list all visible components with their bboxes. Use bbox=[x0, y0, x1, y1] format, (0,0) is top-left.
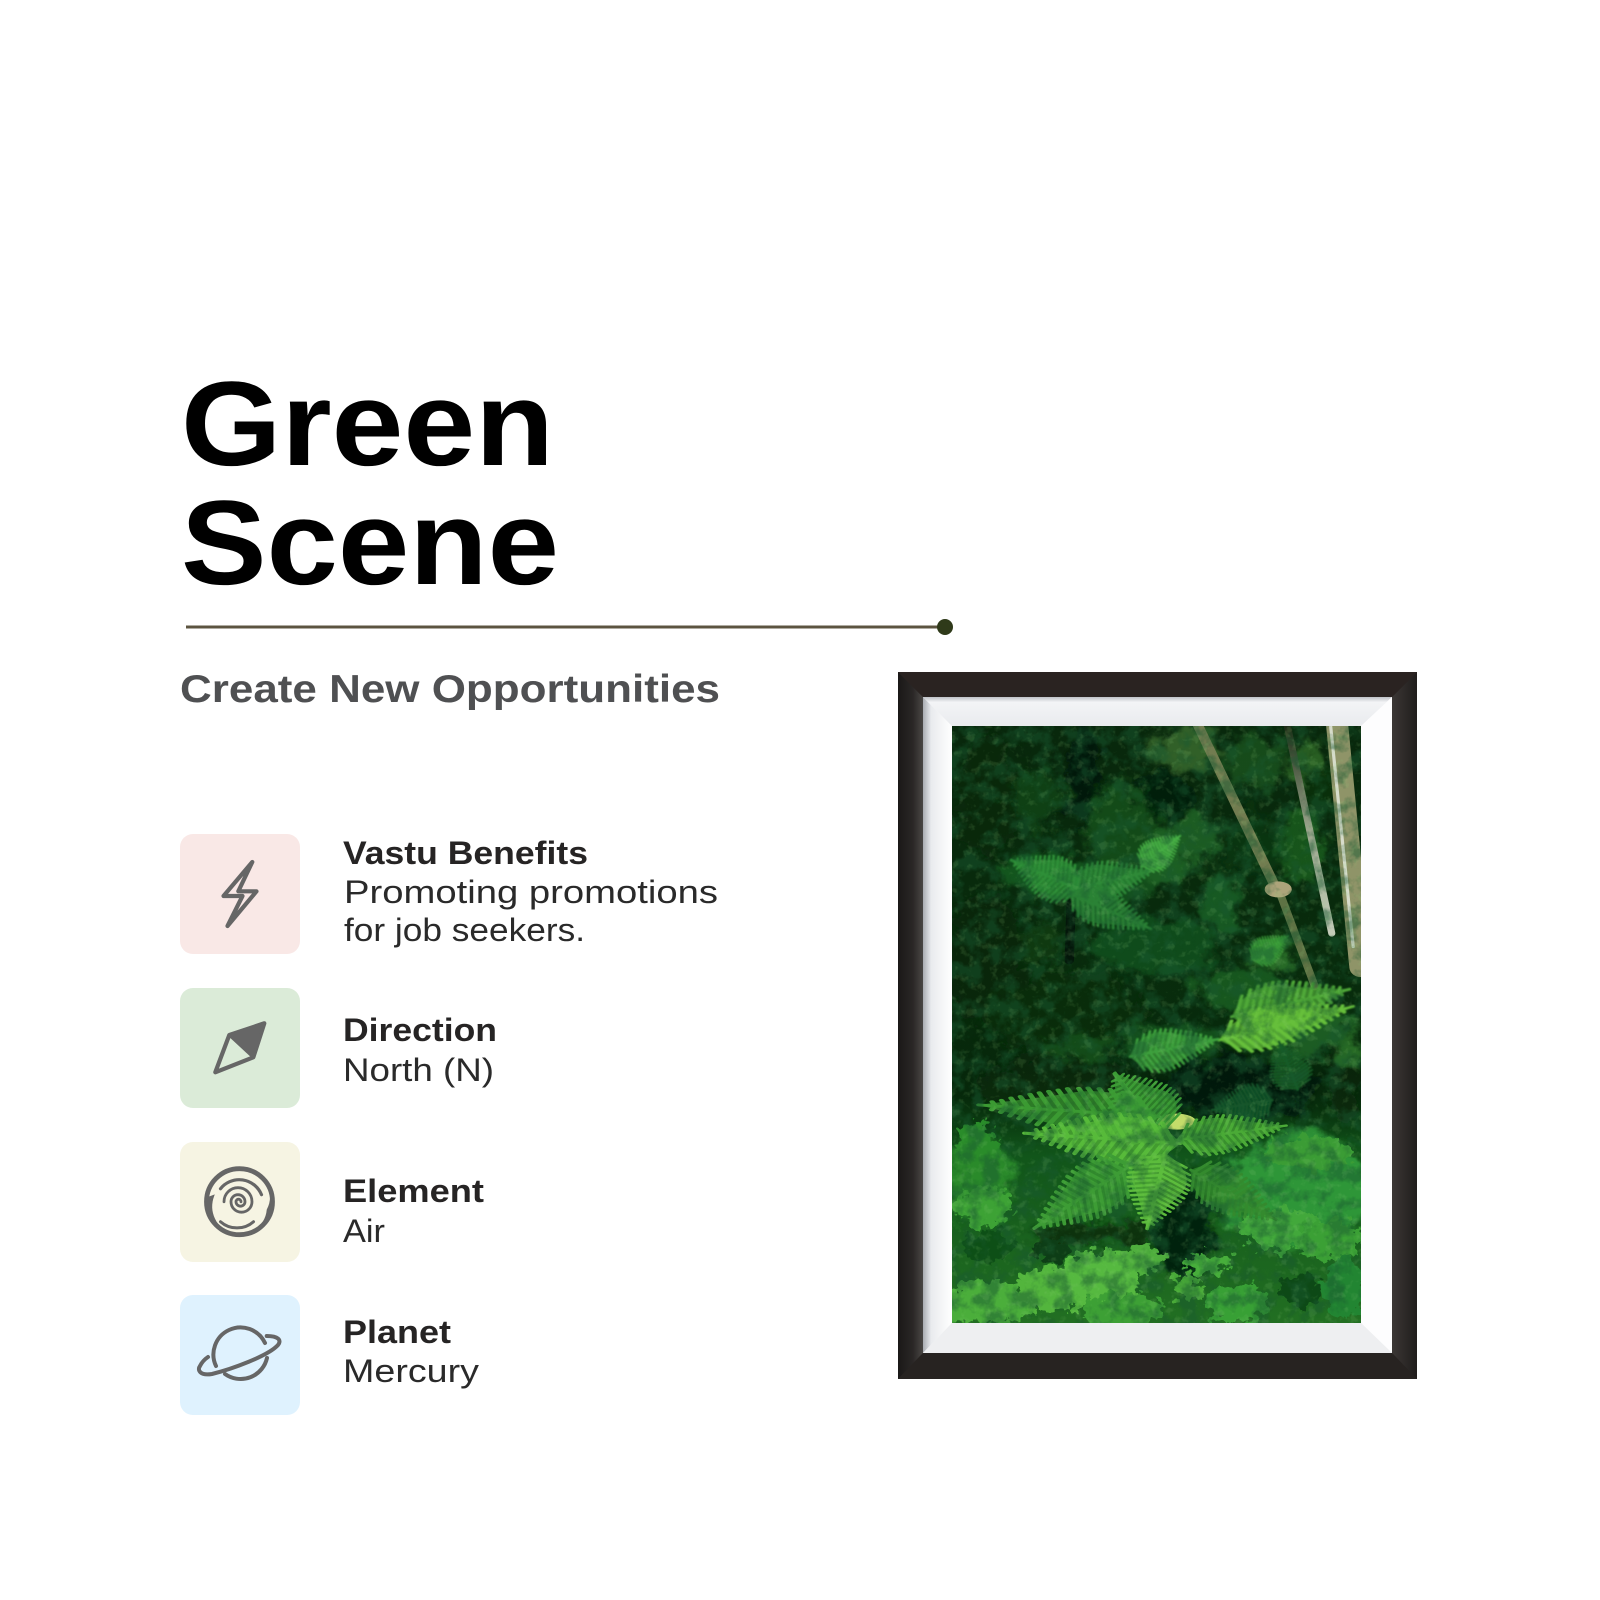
title bbox=[181, 357, 559, 610]
text: direction: Direction bbox=[343, 1012, 497, 1048]
background fern fronds bbox=[1001, 823, 1359, 1129]
black outer frame bbox=[898, 672, 1417, 1379]
icon tile: compass bbox=[180, 988, 300, 1108]
text: element: Element bbox=[343, 1173, 484, 1209]
framed jungle picture bbox=[898, 672, 1417, 1379]
tree trunks bbox=[1069, 725, 1360, 987]
jungle photo illustration bbox=[944, 725, 1373, 1327]
text: element bbox=[343, 1173, 484, 1249]
row: planet bbox=[180, 1295, 479, 1415]
divider line with end dot bbox=[186, 619, 953, 635]
text: element: Air bbox=[343, 1213, 385, 1249]
row: element bbox=[180, 1142, 484, 1262]
text: vastu benefits: for job seekers. bbox=[344, 912, 585, 948]
row: direction bbox=[180, 988, 497, 1108]
text: vastu benefits: Promoting promotions bbox=[344, 874, 718, 910]
title: Green bbox=[181, 357, 554, 491]
bright undergrowth bbox=[944, 1123, 1366, 1327]
text: planet bbox=[343, 1314, 479, 1389]
row: vastu benefits bbox=[180, 834, 718, 954]
text: vastu benefits bbox=[343, 835, 718, 948]
text: vastu benefits: Vastu Benefits bbox=[343, 835, 588, 871]
text: direction bbox=[343, 1012, 497, 1088]
text: planet: Mercury bbox=[343, 1353, 479, 1389]
icon tile: planet bbox=[180, 1295, 300, 1415]
subtitle: Create New Opportunities bbox=[180, 668, 720, 711]
title: Scene bbox=[181, 476, 559, 610]
text: direction: North (N) bbox=[343, 1052, 494, 1088]
main tree fern bbox=[977, 1053, 1289, 1251]
foliage texture bbox=[952, 726, 1361, 1323]
upper shade bbox=[952, 726, 1361, 1132]
icon tile: air swirl bbox=[180, 1142, 300, 1262]
white mat bbox=[923, 697, 1392, 1353]
icon tile: lightning bolt bbox=[180, 834, 300, 954]
text: planet: Planet bbox=[343, 1314, 451, 1350]
